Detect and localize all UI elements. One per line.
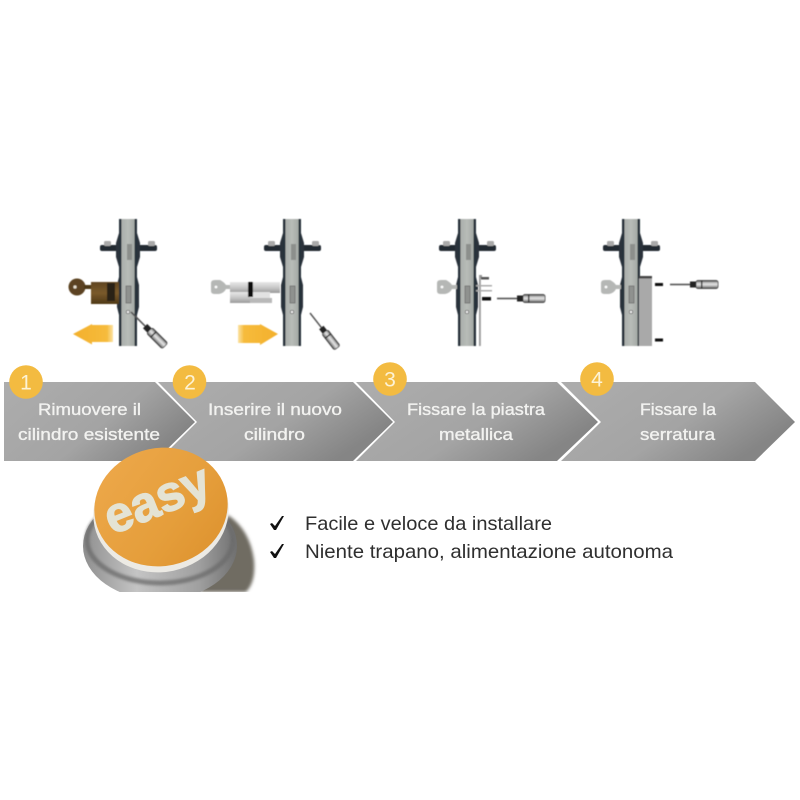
illustration: step 4 fix lock [601, 219, 718, 346]
check mark 2 [270, 544, 284, 558]
arrow segment 4 [561, 382, 795, 461]
process arrows [4, 382, 795, 461]
step 4 label: Fissare la [640, 400, 717, 419]
badge 2: 2 [184, 372, 196, 394]
badge 1 [9, 365, 43, 399]
icon: screwdriver step 1 [128, 309, 168, 349]
benefits list [270, 513, 673, 563]
arrow: left [73, 324, 113, 344]
step 2 label [208, 400, 342, 444]
button shadow [200, 515, 254, 592]
arrow segment 1 [4, 382, 195, 461]
check mark 1 [270, 516, 284, 530]
illustration: step 2 insert cylinder [211, 219, 340, 350]
button label: easy [95, 452, 218, 545]
step 2 label: Inserire il nuovo [208, 400, 342, 419]
illustration: step 3 fix metal plate [437, 219, 545, 346]
badge 3: 3 [384, 368, 396, 392]
step 1 label [18, 400, 160, 444]
button base dark band [83, 516, 233, 587]
step 2 label: cilindro [244, 425, 305, 444]
icon: silver key step 3 [437, 280, 457, 294]
badge 4 [580, 362, 614, 396]
step 3 label: metallica [439, 425, 514, 444]
metal plate with screws [476, 275, 492, 346]
button orange top [94, 448, 228, 566]
arrow segment 3 [356, 382, 598, 461]
button metal base [83, 519, 237, 592]
button white rim [93, 496, 229, 572]
step 1 label: Rimuovere il [38, 400, 141, 419]
arrow segment 2 [158, 382, 393, 461]
step 1 label: cilindro esistente [18, 425, 160, 444]
benefit 1: Facile e veloce da installare [305, 513, 552, 535]
step 4 label [640, 400, 717, 444]
badge 4: 4 [591, 368, 603, 392]
badge 3 [373, 362, 407, 396]
step 3 label: Fissare la piastra [407, 400, 546, 419]
icon: screwdriver step 3 [497, 294, 545, 302]
icon: screwdriver step 4 [670, 280, 718, 288]
badge 1: 1 [20, 372, 32, 394]
step 3 label [407, 400, 546, 444]
icon: silver key step 4 [601, 280, 621, 294]
easy button [83, 448, 257, 592]
badge 2 [173, 365, 206, 399]
icon: brass key and cylinder [68, 278, 119, 304]
step 4 label: serratura [640, 425, 716, 444]
benefit 2: Niente trapano, alimentazione autonoma [305, 541, 673, 563]
icon: silver key and cylinder [211, 280, 280, 303]
icon: screwdriver step 2 [307, 311, 340, 350]
arrow: right [238, 324, 278, 345]
lock body with screws [639, 276, 663, 346]
illustration: step 1 remove cylinder [68, 219, 168, 349]
